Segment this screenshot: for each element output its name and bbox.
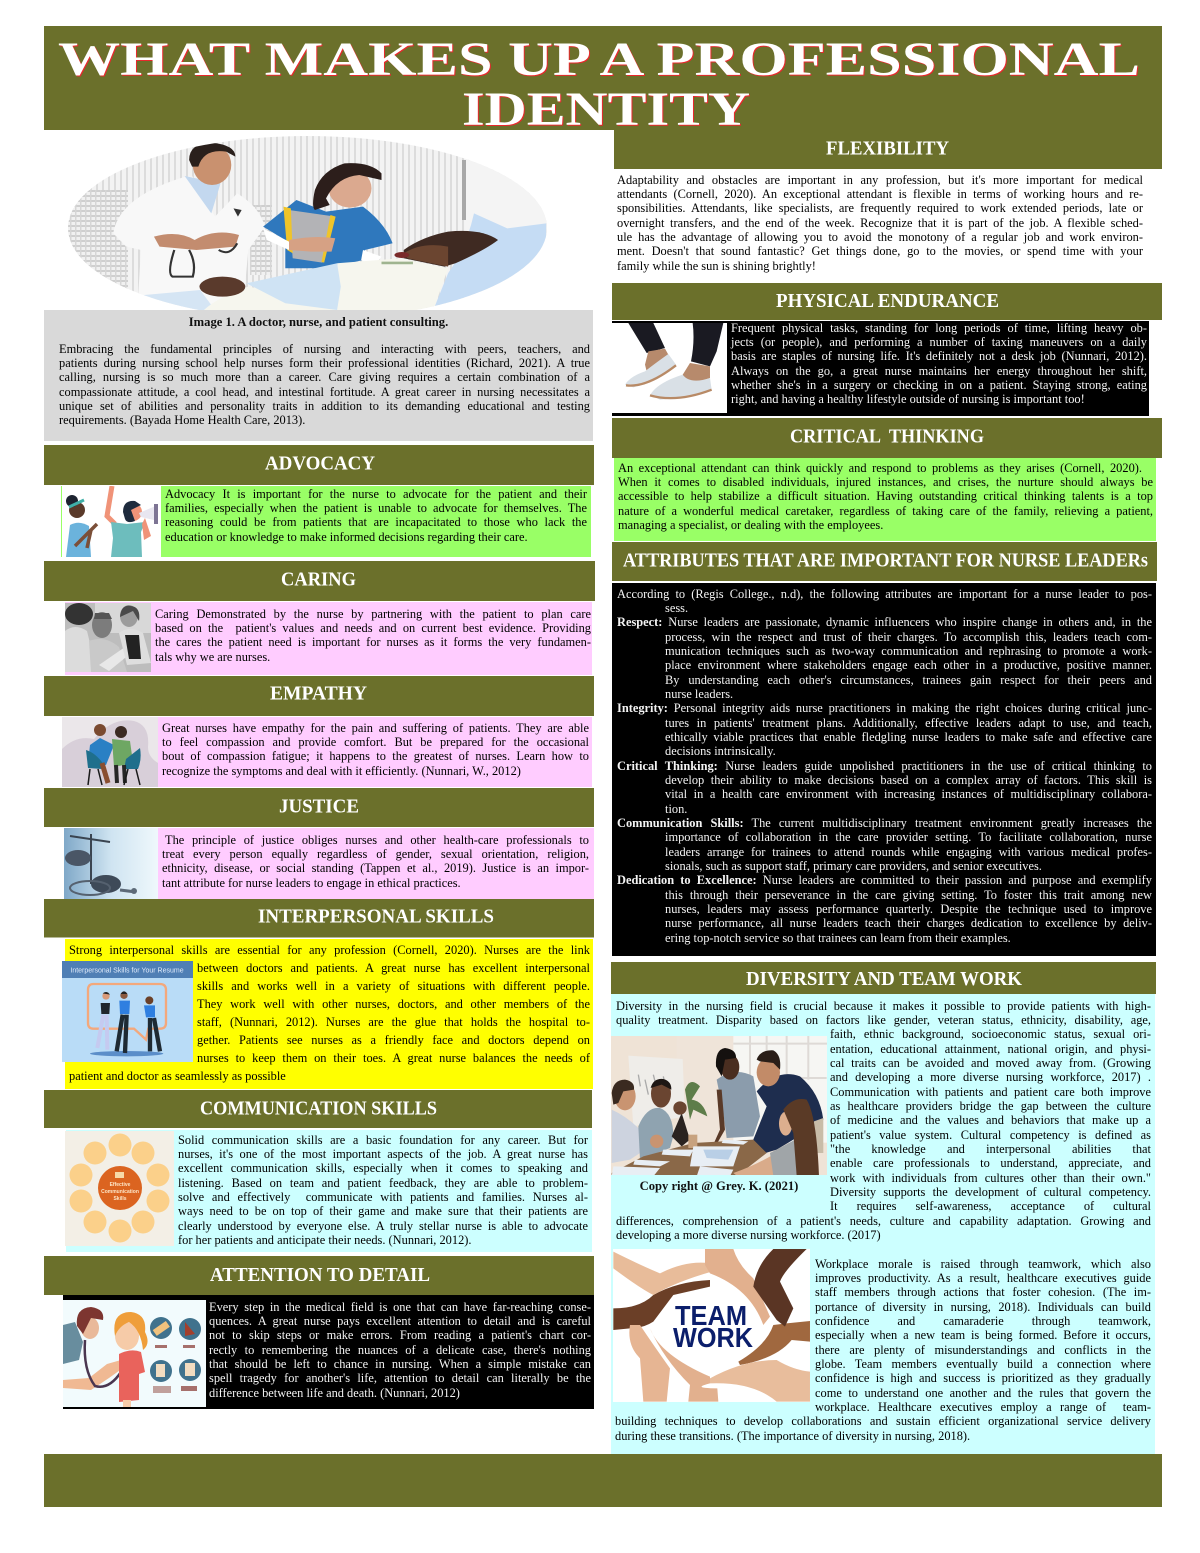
attributes text: ering top-notch service so that trainees can learn from their examples. — [665, 931, 1011, 945]
physical endurance text: Always on the go, a great nurse maintains her energy throughout her shift, — [731, 364, 1147, 378]
interpersonal text: staff, (Nunnari, 2012). Nurses are the glue that holds the hospital to- — [197, 1015, 590, 1029]
team work text: there are plenty of misunderstandings and conflicts in the — [815, 1343, 1151, 1357]
heading: flexibility — [614, 130, 1162, 169]
attributes background — [612, 583, 1156, 956]
diversity background — [611, 994, 1155, 1454]
panel: introduction — [44, 310, 593, 441]
diagram: communication skills wheel: Effective — [110, 1182, 131, 1188]
hero photo: doctor, nurse and patient in an oval — [68, 136, 547, 310]
empathy text: recognize the symptoms and deal with it efficiently. (Nunnari, W., 2012) — [162, 764, 521, 778]
attributes text: Respect: Nurse leaders are passionate, dynamic influencers who inspire change in others and, in the — [617, 615, 1152, 629]
critical thinking background — [614, 458, 1156, 541]
panel: diversity and team work — [611, 962, 1156, 1454]
image: team work hands in a circle — [613, 1249, 810, 1402]
interpersonal text: gether. Patients see nurses as a friendly face and doctors depend on — [197, 1033, 590, 1047]
advocacy background — [161, 486, 591, 557]
team work text: improves productivity. As a result, healthcare executives guide — [815, 1271, 1151, 1285]
empathy text: Great nurses have empathy for the pain and suffering of patients. They are able — [162, 720, 589, 734]
heading: diversity and team work — [611, 962, 1156, 994]
heading: advocacy: ADVOCACY — [265, 452, 376, 474]
empathy text: bout of compassion fatigue; it happens to the greatest of nurses. Learn how to — [162, 749, 589, 763]
diversity text: as healthcare providers bridge the gap between the culture — [830, 1099, 1151, 1113]
physical endurance text: basis are staples of nursing life. It's definitely not a desk job (Nunnari, 2012). — [731, 349, 1147, 363]
attributes text: nurse leaders. — [665, 687, 733, 701]
heading: empathy — [44, 676, 594, 716]
empathy text: to feel compassion and provide comfort. But be prepared for the occasional — [162, 735, 589, 749]
panel: critical thinking — [612, 418, 1162, 541]
attributes text: Communication Skills: The current multidisciplinary treatment environment greatly increases the — [617, 816, 1152, 830]
heading: physical endurance: PHYSICAL ENDURANCE — [776, 290, 999, 312]
advocacy description — [165, 486, 587, 544]
attributes text: leaders arrange for trainees to attend rounds while engaging with various medical profes- — [665, 845, 1152, 859]
communication text: solve and effectively communicate with patients and families. Nurses al- — [178, 1190, 588, 1204]
attention text: that should be left to chance in nursing. When a simple mistake can — [209, 1357, 591, 1371]
physical endurance text: whether she's in a surgery or checking in on a patient. Staying strong, eating — [731, 378, 1147, 392]
interpersonal text: nurses to keep them on their toes. A great nurse balances the needs of — [197, 1051, 590, 1065]
heading: advocacy — [44, 445, 594, 485]
interpersonal text: Strong interpersonal skills are essential for any profession (Cornell, 2020). Nurses are the link — [69, 943, 590, 957]
attributes text: tures in patients' treatment plans. Additionally, effective leaders adapt to use, and teach, — [665, 716, 1152, 730]
photo: white shoes — [612, 323, 727, 413]
communication text — [178, 1132, 588, 1247]
heading: attention to detail — [44, 1256, 594, 1295]
diversity text: "the knowledge and interpersonal abilities that — [830, 1142, 1151, 1156]
attention text: not to skip steps or make errors. From reading a patient's chart cor- — [209, 1328, 591, 1342]
critical thinking text: accessible to help stabilize a difficult situation. Having outstanding critical thinking talents is a top — [618, 489, 1153, 503]
justice text — [162, 832, 589, 890]
attributes text: importance of collaboration in the care provider setting. To facilitate collaboration, nurse — [665, 830, 1152, 844]
photo: caring nurses with patient — [65, 603, 151, 672]
attributes text: nurse performance, all nurse leaders teach their charges dedication to excellence by deliv- — [665, 916, 1152, 930]
justice text: tant attribute for nurse leaders to engage in ethical practices. — [162, 876, 461, 890]
advocacy description: Advocacy It is important for the nurse to advocate for the patient and their — [165, 486, 587, 500]
attributes text: sess. — [665, 601, 688, 615]
diversity text — [616, 998, 1151, 1242]
image: team work hands in a circle: WORK — [673, 1322, 753, 1353]
communication text: ways need to be on top of their game and make sure that their patients are — [178, 1204, 588, 1218]
title banner: WHAT MAKES UP A PROFESSIONAL — [58, 33, 1140, 86]
photo: scales of justice — [64, 828, 158, 899]
team work text: staff members through actions that foster cohesion. (The im- — [815, 1285, 1151, 1299]
attributes text: nurses, leaders may assess performance quarterly. Despite the technique used to improve — [665, 902, 1152, 916]
team work text: confidence and camaraderie through teamwork, — [815, 1314, 1151, 1328]
attention text: rectly to remembering the nuances of a delicate case, there's nothing — [209, 1343, 591, 1357]
heading: communication skills — [44, 1090, 592, 1128]
attributes text: vital in a health care environment with increasing instances of multidisciplinary collabora- — [665, 787, 1152, 801]
illustration: nurse comforting a patient — [62, 717, 158, 787]
heading: interpersonal skills — [44, 899, 594, 938]
communication background — [66, 1130, 592, 1252]
empathy background — [62, 717, 592, 787]
interpersonal text: between doctors and patients. A great nurse has excellent interpersonal — [197, 961, 590, 975]
critical thinking text: managing a specialist, or dealing with the employees. — [618, 518, 883, 532]
communication text: excellent communication skills, especially when it comes to speaking and — [178, 1161, 588, 1175]
attributes text: develop their ability to make decisions based on a complex array of factors. This skill is — [665, 773, 1152, 787]
flexibility text: attendants (Cornell, 2020). An exceptional attendant is flexible in terms of working hours and re- — [617, 187, 1143, 201]
caring text: tals why we are nurses. — [155, 650, 270, 664]
flexibility text: ment. Doesn't that sound fantastic? Get things done, go to the movies, or spend time with your — [617, 244, 1143, 258]
team work text — [615, 1256, 1151, 1443]
diversity text: developing a more diverse nursing workforce. (2017) — [616, 1228, 881, 1242]
critical thinking text — [618, 460, 1153, 532]
advocacy description: education or knowledge to make informed decisions regarding their care. — [165, 530, 528, 544]
flexibility text: overnight transfers, and the end of the week. Recognize that it is part of the job. A flexible sched- — [617, 216, 1143, 230]
diversity text: work with individuals from cultures other than their own." — [830, 1171, 1151, 1185]
attributes text: Integrity: Personal integrity aids nurse practitioners in making the right choices during critical junc- — [617, 701, 1152, 715]
diversity text: entation, educational attainment, national origin, and physi- — [830, 1042, 1151, 1056]
interpersonal text: patient and doctor as seamlessly as possible — [69, 1069, 286, 1083]
heading: justice — [44, 788, 594, 827]
flexibility text: sponsibilities. Attendants, like specialists, are frequently required to work extended periods, late or — [617, 201, 1143, 215]
attributes text: Dedication to Excellence: Nurse leaders are committed to their passion and purpose and exemplify — [617, 873, 1152, 887]
photo caption: Copy right @ Grey. K. (2021) — [640, 1178, 798, 1192]
attributes text: ethically viable practices that enable fledgling nurse leaders to make safe and effective care — [665, 730, 1152, 744]
attributes text: munication techniques such as two-way communication and rephrasing to promote a work- — [665, 644, 1152, 658]
critical thinking text: When it comes to disabled individuals, injured instances, and crises, the nurture should always be — [618, 475, 1153, 489]
justice text: treat every person equally regardless of gender, sexual orientation, religion, — [162, 847, 589, 861]
panel: interpersonal skills — [44, 899, 594, 1089]
caring text: Caring Demonstrated by the nurse by partnering with the patient to plan care — [155, 606, 591, 620]
team work text: building techniques to develop collaborations and sustain efficient organizational service delivery — [615, 1414, 1151, 1428]
critical thinking text: An exceptional attendant can think quickly and respond to problems as they arises (Cornell, 2020). — [618, 460, 1142, 474]
advocacy description: families, especially when the patient is unable to advocate for themselves. The — [165, 501, 587, 515]
attributes text: tion. — [665, 802, 687, 816]
interpersonal text: skills and works well in a variety of situations with different people. — [197, 979, 590, 993]
attributes text: place environment where stakeholders engage each other in a productive, positive manner. — [665, 658, 1152, 672]
flexibility text: ule has the advantage of allowing you to avoid the monotony of a regular job and work environ- — [617, 230, 1143, 244]
heading: communication skills: COMMUNICATION SKILLS — [200, 1098, 437, 1120]
panel: attributes for nurse leaders — [612, 542, 1157, 956]
introduction text — [59, 342, 590, 427]
caring text — [155, 606, 591, 664]
diversity text: of medicine and the values and behaviors that make up a — [830, 1113, 1151, 1127]
diversity text: quality treatment. Disparity based on factors like gender, veteran status, ethnicity, disability, age, — [616, 1013, 1151, 1027]
introduction text: unique set of abilities and personality traits in addition to its demanding educational and testing — [59, 399, 590, 413]
heading: interpersonal skills: INTERPERSONAL SKILLS — [258, 906, 494, 928]
photo: diverse team around a table — [611, 1036, 827, 1175]
introduction text: patients during nursing school help nurses form their professional identities (Richard, 2021). A true — [59, 356, 590, 370]
heading: flexibility: FLEXIBILITY — [826, 138, 950, 160]
team work text: confidence is high and success is prioritized as they gradually — [815, 1371, 1151, 1385]
title banner — [44, 26, 1162, 130]
attributes text — [617, 586, 1152, 945]
advocacy description: reasoning could be from patients that are incapacitated to those who lack the — [165, 515, 587, 529]
physical endurance text — [730, 320, 1147, 406]
justice text: The principle of justice obliges nurses and other health-care professionals to — [165, 832, 589, 846]
diagram: communication skills wheel — [65, 1131, 174, 1246]
introduction text: compassionate attitude, a cool head, and intestinal fortitude. A great career in nursing necessitates a — [59, 385, 590, 399]
diversity text: It requires self-awareness, acceptance of cultural — [830, 1199, 1151, 1213]
communication text: clearly understood by everyone else. A truly stellar nurse is able to advocate — [178, 1219, 588, 1233]
footer band — [44, 1454, 1162, 1507]
team work text: Workplace morale is raised through teamwork, which also — [815, 1256, 1151, 1270]
attention text: Every step in the medical field is one that can have far-reaching conse- — [209, 1300, 591, 1314]
illustration: three colleagues in speech bubble — [62, 961, 193, 1062]
heading: critical thinking — [612, 418, 1162, 458]
heading: caring: CARING — [281, 568, 356, 590]
diversity text: cal traits can be avoided and moved away from. (Growing — [830, 1056, 1151, 1070]
flexibility text: Adaptability and obstacles are important in any profession, but it's more important for medical — [617, 172, 1143, 186]
introduction text: requirements. (Bayada Home Health Care, 2013). — [59, 413, 305, 427]
diversity text: enable care professionals to understand, appreciate, and — [830, 1156, 1151, 1170]
team work text: globe. Team members eventually build a connection where — [815, 1357, 1151, 1371]
team work text: come to understand one another and the rules that govern the — [815, 1386, 1151, 1400]
diversity text: Communication with patients and patient care both improve — [830, 1085, 1151, 1099]
attention text — [209, 1300, 591, 1400]
physical endurance text: jects (or people), and performing a number of taxing maneuvers on a daily — [731, 335, 1147, 349]
diagram: communication skills wheel: Communication — [101, 1189, 139, 1195]
interpersonal text — [69, 943, 590, 1083]
heading: attributes — [612, 542, 1157, 581]
panel: attention to detail — [44, 1256, 594, 1409]
flexibility text: family while the sun is shining brightly! — [617, 259, 816, 273]
team work text: especially when a new team is being formed. Before it occurs, — [815, 1328, 1151, 1342]
communication text: nurses, it's one of the most important aspects of the job. A great nurse has — [178, 1147, 588, 1161]
panel: empathy — [44, 676, 594, 787]
heading: caring — [44, 561, 595, 601]
heading: diversity and team work: DIVERSITY AND TEAM WORK — [746, 968, 1022, 990]
attributes text: According to (Regis College., n.d), the following attributes are important for a nurse leader to pos- — [617, 586, 1152, 600]
communication text: for her patients and anticipate their needs. (Nunnari, 2012). — [178, 1233, 472, 1247]
panel: communication skills — [44, 1090, 592, 1252]
attributes text: decisions intrinsically. — [665, 744, 776, 758]
introduction text: Embracing the fundamental principles of nursing and interacting with peers, teachers, and — [59, 342, 590, 356]
team work text: portance of diversity in nursing, 2018). Individuals can build — [815, 1300, 1151, 1314]
heading: justice: JUSTICE — [279, 796, 359, 818]
attention text: difference between life and death. (Nunnari, 2012) — [209, 1386, 460, 1400]
attributes text: this through their perseverance in the care giving setting. To foster this trait among new — [665, 888, 1152, 902]
caring text: the cares the patient need is important for nurses as it forms the very fundamen- — [155, 635, 591, 649]
panel: physical endurance — [612, 283, 1162, 416]
flexibility text — [617, 172, 1143, 273]
heading: critical thinking: CRITICAL THINKING — [790, 426, 984, 448]
attributes text: process, win the respect and trust of their charges. To accomplish this, leaders teach com- — [665, 630, 1152, 644]
communication text: listening. Based on team and patient feedback, they are able to problem- — [178, 1176, 588, 1190]
illustration: nurse examining a child — [63, 1300, 206, 1407]
image: team work hands in a circle: TEAM — [675, 1300, 747, 1331]
diversity text: Diversity in the nursing field is crucial because it makes it possible to provide patients with high- — [616, 998, 1151, 1012]
team work text: workplace. Healthcare executives employ a range of team- — [815, 1400, 1151, 1414]
panel: flexibility — [614, 130, 1162, 273]
team work text: during these transitions. (The importance of diversity in nursing, 2018). — [615, 1429, 970, 1443]
introduction text: calling, nursing is so much more than a career. Care giving requires a certain combination of a — [59, 370, 590, 384]
critical thinking text: nature of a wonderful medical caretaker, regardless of taking care of the family, relieving a patient, — [618, 504, 1153, 518]
caring background — [65, 602, 592, 675]
diversity text: faith, ethnic background, socioeconomic status, sexual ori- — [830, 1027, 1151, 1041]
panel: caring — [44, 561, 595, 675]
diagram: communication skills wheel: Skills — [113, 1196, 127, 1202]
attention background — [63, 1295, 594, 1409]
physical endurance text: Frequent physical tasks, standing for long periods of time, lifting heavy ob- — [731, 320, 1147, 334]
physical endurance text: right, and having a healthy lifestyle outside of nursing is important too! — [731, 392, 1085, 406]
heading: empathy: EMPATHY — [270, 682, 368, 704]
caring text: based on the patient's values and needs and on current best evidence. Providing — [155, 621, 591, 635]
justice background — [64, 828, 594, 899]
communication text: Solid communication skills are a basic foundation for any career. But for — [178, 1132, 588, 1146]
diversity text: patient's value system. Cultural competency is defined as — [830, 1128, 1151, 1142]
interpersonal text: They work well with other nurses, doctors, and other members of the — [197, 997, 590, 1011]
panel: justice — [44, 788, 594, 899]
icon: nurses advocating with megaphone — [61, 486, 158, 557]
attributes text: sionals, such as support staff, primary care providers, and senior executives. — [665, 859, 1042, 873]
heading: physical endurance — [612, 283, 1162, 320]
attention text: spell tragedy for another's life, attention to detail can literally be the — [209, 1371, 591, 1385]
diversity text: differences, comprehension of a patient's needs, culture and capability adaptation. Growing and — [616, 1214, 1151, 1228]
heading: attention to detail: ATTENTION TO DETAIL — [210, 1264, 430, 1286]
diversity text: Diversity supports the development of cultural competency. — [830, 1185, 1151, 1199]
physical endurance background — [612, 321, 1149, 416]
attributes text: Critical Thinking: Nurse leaders guide unpolished practitioners in the use of critical thinking to — [617, 759, 1152, 773]
illustration: three colleagues in speech bubble: Interpersonal Skills for Your Resume — [70, 968, 184, 974]
panel: advocacy — [44, 445, 594, 557]
attention text: quences. A great nurse pays excellent attention to detail and is careful — [209, 1314, 591, 1328]
empathy text — [162, 720, 589, 778]
attributes text: By understanding each other's circumstances, trainees gain respect for their peers and — [665, 673, 1152, 687]
interpersonal background — [65, 939, 593, 1089]
image caption: Image 1. A doctor, nurse, and patient consulting. — [189, 315, 448, 329]
justice text: ethnicity, disease, or social standing (Tappen et al., 2019). Justice is an impor- — [162, 861, 589, 875]
diversity text: and developing a more diverse nursing workforce, 2017) . — [830, 1070, 1151, 1084]
